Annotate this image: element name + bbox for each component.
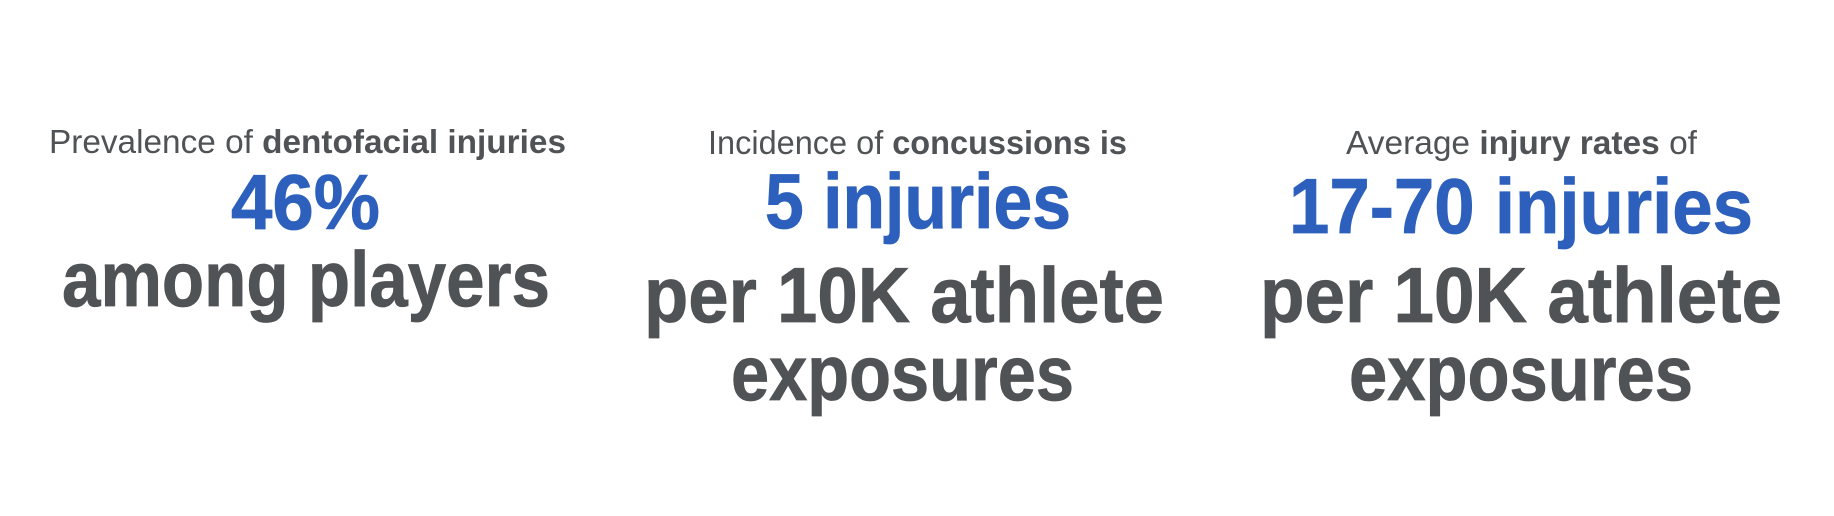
text: exposures: exposures bbox=[1349, 329, 1693, 417]
panel: average injury rates bbox=[1260, 124, 1782, 417]
text: exposures: exposures bbox=[731, 329, 1074, 417]
text: prevalence intro: Prevalence of dentofacial injuries bbox=[49, 123, 566, 160]
text: per 10K athlete: per 10K athlete bbox=[644, 251, 1164, 339]
panel: concussions bbox=[644, 124, 1164, 417]
text: among players: among players bbox=[62, 235, 550, 323]
stat: 46%: 46% bbox=[231, 158, 380, 246]
text: concussion intro: Incidence of concussions is bbox=[708, 124, 1127, 161]
text: per 10K athlete: per 10K athlete bbox=[1260, 251, 1782, 339]
stat: 17-70 injuries: 17-70 injuries bbox=[1289, 162, 1753, 250]
panel: dentofacial injuries bbox=[49, 123, 566, 323]
stat: 5 injuries: 5 injuries bbox=[765, 157, 1071, 245]
text: injury rates intro: Average injury rates of bbox=[1346, 124, 1698, 161]
